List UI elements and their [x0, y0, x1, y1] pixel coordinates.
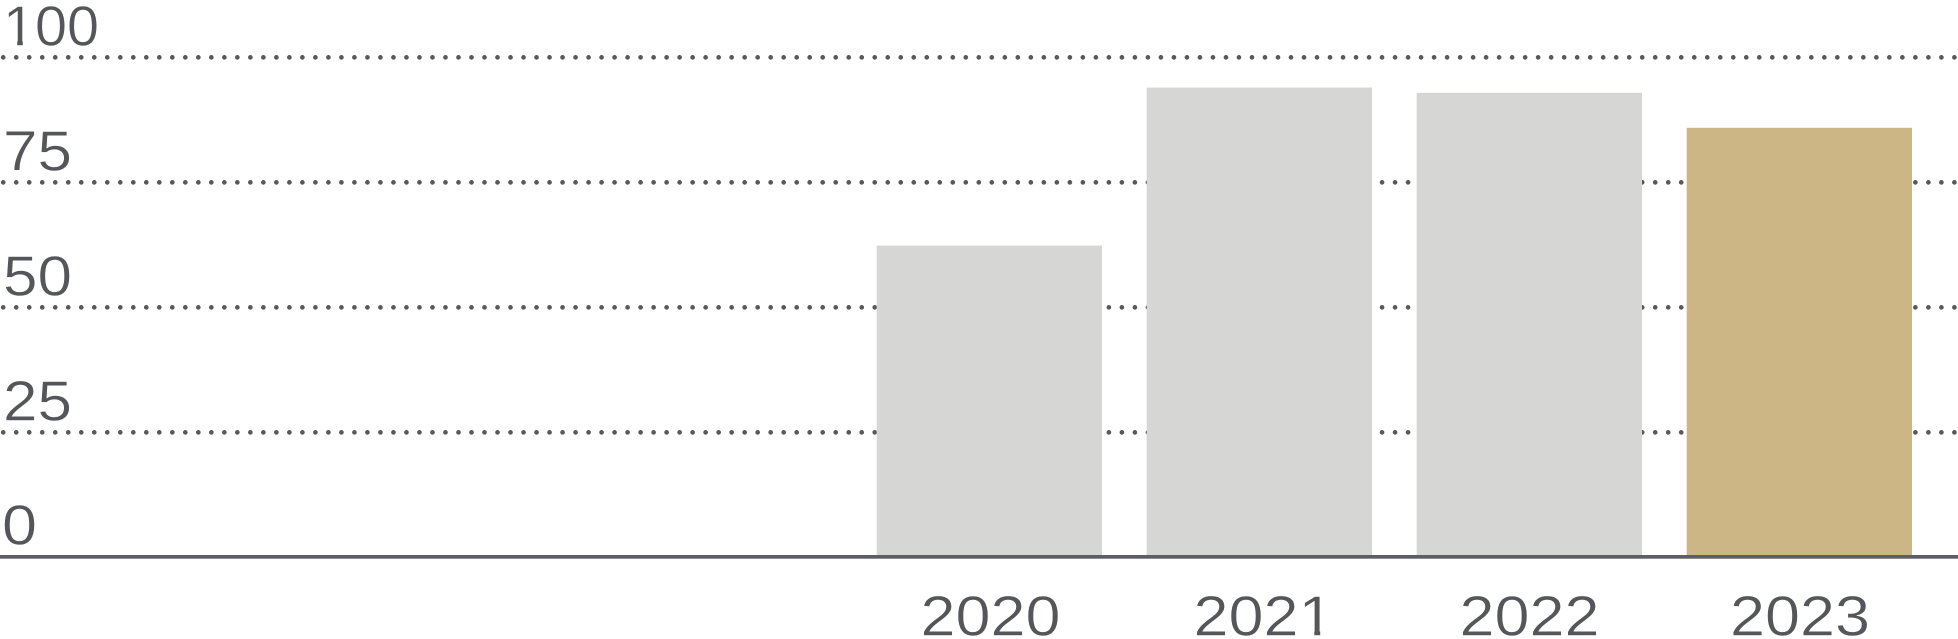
x-axis baseline [0, 555, 1958, 559]
bar 2022 [1417, 93, 1642, 556]
bar 2023 [1687, 128, 1912, 556]
y label 0: 0 [2, 494, 37, 558]
y label 75: 75 [3, 120, 72, 184]
bar 2020 [877, 246, 1102, 556]
y label 50: 50 [3, 244, 72, 308]
y label 25: 25 [3, 370, 72, 434]
bar 2021 [1147, 88, 1372, 556]
bars [877, 88, 1912, 556]
x-axis labels [920, 584, 1870, 639]
y-axis labels [2, 0, 99, 558]
